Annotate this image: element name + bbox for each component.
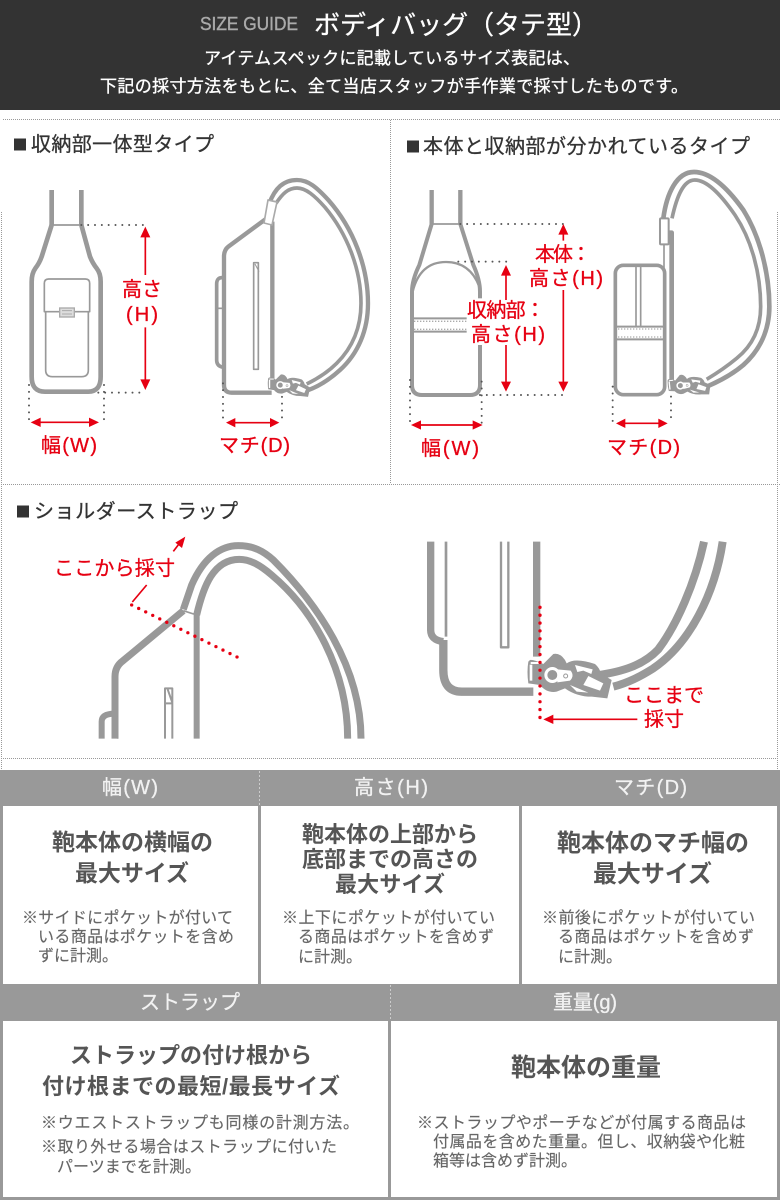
cell note: width: ※サイドにポケットが付いて (22, 909, 233, 927)
diagram: strap measuring end point (431, 542, 723, 724)
cell heading: strap: ストラップ (140, 992, 240, 1014)
size guide label: SIZE GUIDE (200, 14, 298, 34)
cell heading: width: 幅(W) (102, 776, 158, 799)
cell note: weight: ※ストラップやポーチなどが付属する商品は (417, 1114, 746, 1132)
header band (0, 0, 780, 110)
cell note: width: いる商品はポケットを含め (38, 928, 234, 946)
cell title: depth: 鞄本体のマチ幅の (557, 830, 749, 857)
heading: integrated type: ■ (12, 134, 28, 155)
diagram: side view with depth (217, 180, 368, 427)
cell title: height: 鞄本体の上部から (302, 822, 478, 847)
heading: shoulder strap: ショルダーストラップ (34, 500, 238, 523)
icon: strap buckle, separate type (667, 372, 711, 399)
cell title: strap: 付け根までの最短/最長サイズ (42, 1074, 340, 1099)
cell note: depth: る商品はポケットを含めず (558, 928, 754, 946)
cell title: height: 最大サイズ (335, 872, 445, 897)
cell note: weight (417, 1114, 746, 1170)
title: ボディバッグ（タテ型） (314, 10, 598, 40)
panel: separate body and storage type (406, 135, 769, 460)
cell note: depth: に計測。 (558, 948, 622, 966)
cell note: strap: ※取り外せる場合はストラップに付いた (41, 1138, 337, 1156)
panel: shoulder strap (16, 500, 723, 739)
cell note: strap: パーツまでを計測。 (57, 1158, 201, 1176)
intro text: アイテムスペックに記載しているサイズ表記は、 (204, 49, 580, 68)
label: height: (H) (126, 304, 158, 326)
cell title: weight: 鞄本体の重量 (511, 1054, 661, 1082)
intro text (100, 49, 688, 96)
diagram: side view with depth (613, 172, 769, 428)
diagram: front view with width and height (29, 190, 150, 427)
cell note: height (282, 909, 495, 966)
cell: weight (391, 991, 777, 1197)
cell title: depth (557, 830, 749, 888)
cell: depth (522, 777, 777, 984)
cell heading: height: 高さ(H) (354, 776, 428, 799)
panel: integrated storage type (12, 133, 368, 457)
label: body height (529, 243, 603, 290)
label: measure to here: 採寸 (644, 708, 684, 731)
cell title: depth: 最大サイズ (593, 860, 712, 888)
heading: shoulder strap: ■ (16, 501, 31, 522)
cell heading: weight: 重量(g) (553, 991, 617, 1014)
label: depth: マチ(D) (607, 437, 680, 459)
cell title: height: 底部までの高さの (302, 847, 478, 872)
intro text: 下記の採寸方法をもとに、全て当店スタッフが手作業で採寸したものです。 (100, 77, 688, 96)
cell note: strap (41, 1114, 359, 1176)
label: storage height: 収納部： (467, 299, 545, 322)
heading: separate type: ■ (406, 136, 421, 157)
cell note: width: ずに計測。 (38, 947, 118, 965)
label: width: 幅(W) (421, 437, 479, 460)
cell note: depth (542, 909, 755, 966)
label: measure to here (624, 685, 704, 731)
cell title: height (302, 822, 478, 897)
heading: separate type: 本体と収納部が分かれているタイプ (423, 135, 750, 158)
cell title: strap: ストラップの付け根から (70, 1043, 312, 1068)
diagram: strap measuring start point (102, 537, 361, 739)
label: width: 幅(W) (41, 434, 97, 457)
label: depth: マチ(D) (219, 435, 290, 457)
cell note: height: る商品はポケットを含めず (298, 928, 494, 946)
label: body height: 高さ(H) (529, 267, 603, 290)
cell title: strap (42, 1043, 340, 1099)
cell: width (3, 776, 258, 984)
label: storage height: 高さ(H) (471, 323, 545, 346)
cell note: width (22, 909, 234, 965)
label: storage height (467, 299, 545, 346)
label: height (122, 278, 162, 326)
cell note: height: ※上下にポケットが付いてい (282, 909, 495, 927)
cell: height (261, 776, 519, 984)
label: measure to here: ここまで (624, 685, 704, 707)
diagram: front view with width and heights (410, 190, 568, 430)
cell note: strap: ※ウエストストラップも同様の計測方法。 (41, 1114, 359, 1132)
cell note: weight: 箱等は含めず計測。 (433, 1152, 577, 1170)
label: body height: 本体： (535, 243, 591, 266)
table: measurement definitions (0, 770, 780, 1200)
cell note: weight: 付属品を含めた重量。但し、収納袋や化粧 (433, 1133, 745, 1151)
heading: integrated type: 収納部一体型タイプ (31, 133, 214, 156)
cell note: depth: ※前後にポケットが付いてい (542, 909, 755, 927)
icon: strap buckle, integrated type (268, 374, 310, 397)
label: height: 高さ (122, 278, 162, 301)
cell heading: depth: マチ(D) (614, 777, 687, 799)
cell note: height: に計測。 (298, 948, 362, 966)
cell title: width: 鞄本体の横幅の (52, 829, 213, 855)
cell title: width (52, 829, 213, 886)
label: measure from here: ここから採寸 (54, 557, 175, 580)
cell title: width: 最大サイズ (75, 860, 189, 886)
cell: strap (3, 992, 388, 1197)
